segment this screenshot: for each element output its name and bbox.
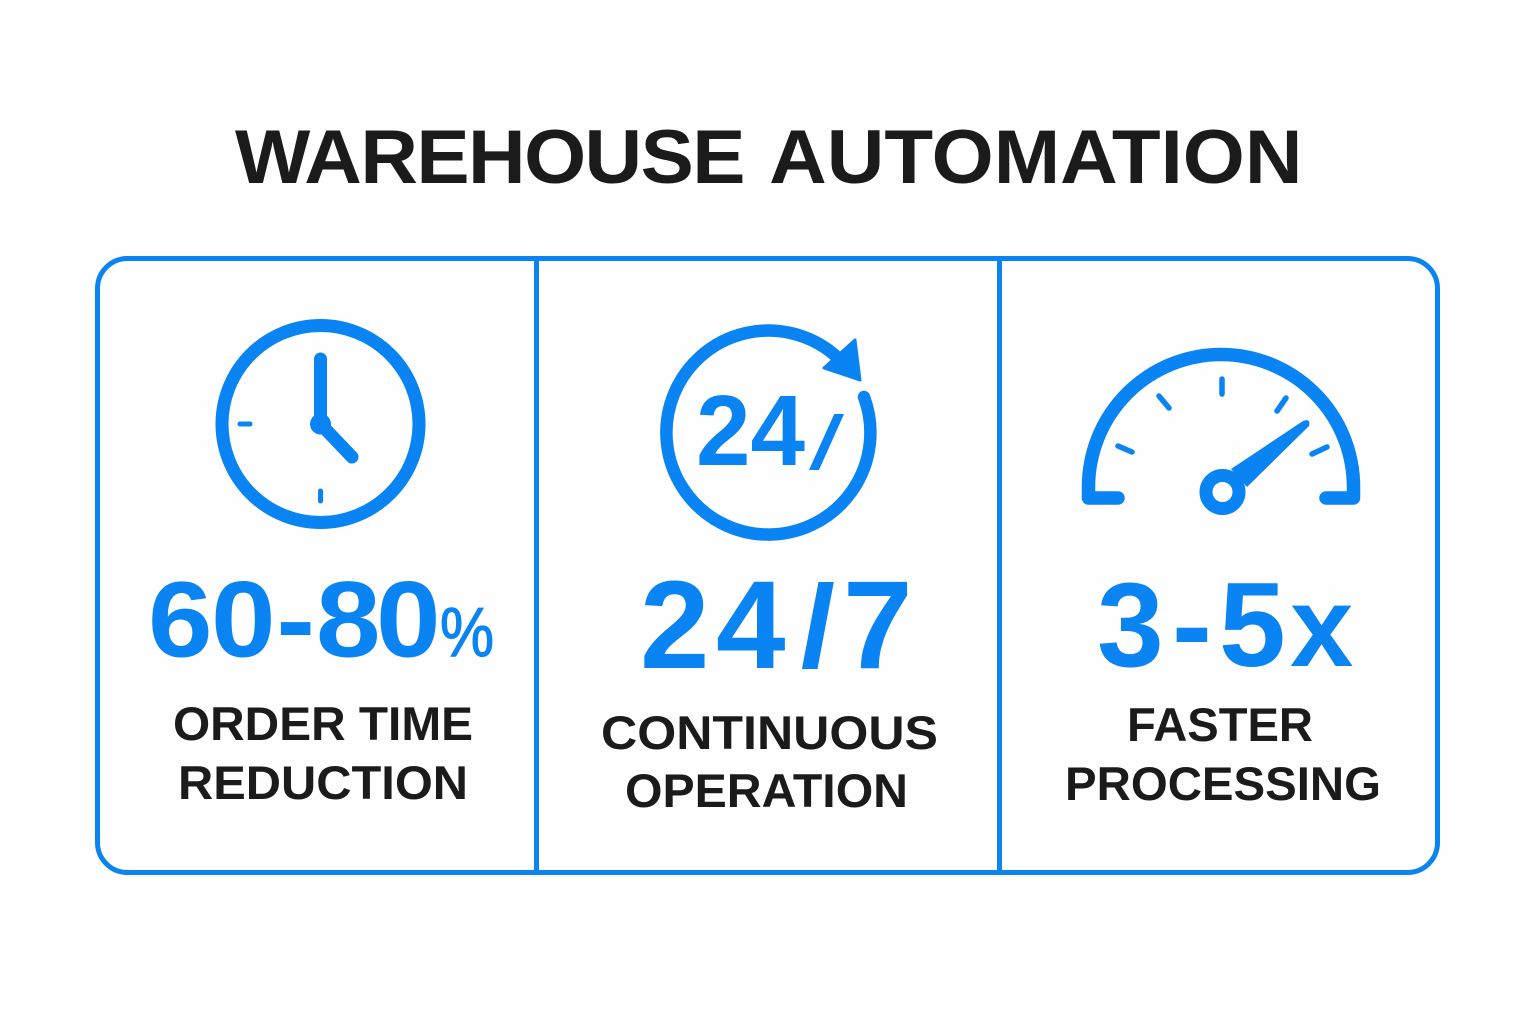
stat: 3-5x: x [1290,564,1353,691]
icon: 24/7 circular arrow: / [809,401,845,486]
label: faster processing [1065,698,1381,810]
panel frame [98,258,1438,872]
panel: order time reduction [100,261,534,870]
stat: 24/7: 24 [640,556,786,695]
label: continuous operation [601,706,938,817]
label: faster processing: FASTER [1127,698,1313,751]
label: order time reduction [173,697,473,809]
title: AUTOMATION [769,114,1302,200]
icon: clock [222,326,419,522]
icon: 24/7 circular arrow [666,331,870,535]
label: continuous operation: OPERATION [625,764,908,817]
stat: 24/7: / [802,564,834,691]
stat: 60-80%: 60-80 [148,559,441,680]
stat: 24/7: 7 [843,556,913,695]
title: WAREHOUSE [235,114,744,200]
label: order time reduction: ORDER TIME [173,697,473,750]
panel: continuous operation [539,261,997,870]
stat: 60-80%: % [440,593,494,671]
label: continuous operation: CONTINUOUS [601,706,938,759]
stat: 3-5x: 3-5 [1097,558,1286,692]
label: faster processing: PROCESSING [1065,757,1381,810]
panel: faster processing [1002,261,1436,870]
icon: speedometer gauge [1088,354,1354,508]
label: order time reduction: REDUCTION [178,756,468,809]
icon: 24/7 circular arrow: 24 [696,375,805,487]
